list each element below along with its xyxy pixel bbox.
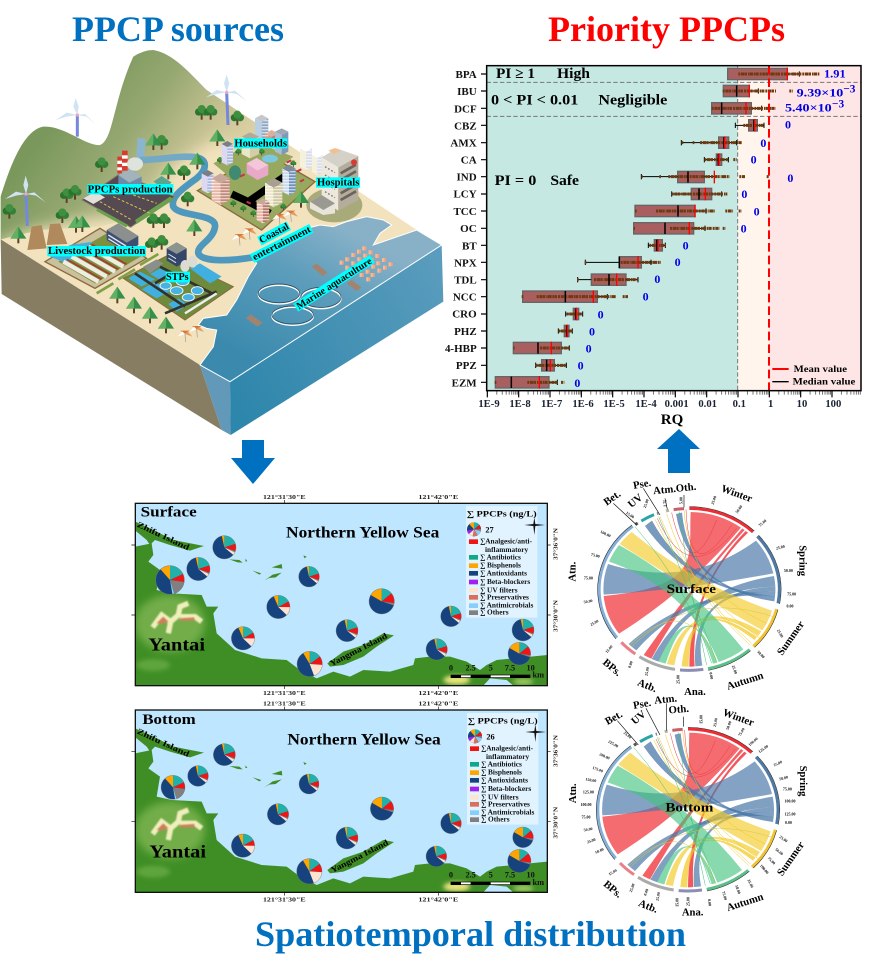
x axis tick labels: 1E-7 xyxy=(541,399,563,410)
sector tick labels: 125.00 xyxy=(785,812,795,817)
priority index values: 0 xyxy=(683,238,689,252)
sector tick labels: 25.00 xyxy=(655,892,661,901)
sector tick labels: 50.00 xyxy=(779,774,789,781)
coordinate labels: 121°31'30"E xyxy=(263,494,306,501)
fish cages xyxy=(258,284,341,325)
city block xyxy=(197,142,315,230)
sector tick labels: 25.00 xyxy=(675,675,680,684)
map legend: ∑ Bisphenols xyxy=(481,768,522,777)
sector tick labels: 200.00 xyxy=(599,751,611,761)
sector tick labels: 15.00 xyxy=(604,644,614,654)
x axis tick labels: 0.01 xyxy=(698,399,717,410)
sector tick labels: 25.00 xyxy=(623,730,633,740)
sector labels xyxy=(568,693,808,919)
sea label: Northern Yellow Sea xyxy=(286,525,440,542)
sand xyxy=(0,138,415,362)
label: Livestock production: Livestock production xyxy=(48,246,146,257)
coordinate labels: 121°31'30"E xyxy=(263,897,306,904)
sector tick labels: 125.00 xyxy=(757,744,769,754)
threshold RQ = 1 xyxy=(766,66,772,391)
x axis tick labels: 1E-9 xyxy=(478,399,500,410)
livestock farm xyxy=(45,223,158,293)
sector tick labels: 75.00 xyxy=(757,518,767,528)
priority index values: 0 xyxy=(675,255,681,269)
sector tick labels: 50.00 xyxy=(583,826,593,832)
scale bar: 10 xyxy=(526,663,535,672)
x axis tick labels: 1E-5 xyxy=(603,399,625,410)
sector tick labels: 50.00 xyxy=(725,720,732,731)
sector tick labels: 75.00 xyxy=(584,575,593,580)
x axis tick labels: 1E-6 xyxy=(572,399,594,410)
sector tick labels: 0.00 xyxy=(708,672,715,680)
sector tick labels: 25.00 xyxy=(773,759,783,767)
arrow: sources down to distribution xyxy=(231,440,275,484)
map legend xyxy=(466,506,537,618)
scale bar: 5 xyxy=(489,871,493,880)
compound labels: PHZ xyxy=(454,326,477,338)
x axis tick labels: 0.1 xyxy=(733,399,746,410)
sector tick labels: 75.00 xyxy=(721,891,728,901)
block left face xyxy=(1,239,222,430)
sector tick labels: 25.00 xyxy=(731,664,739,675)
sector labels: Ana. xyxy=(682,908,704,919)
map legend: ∑ Preservatives xyxy=(480,592,529,601)
map legend: ∑ UV filters xyxy=(481,792,519,801)
sector tick labels: 25.00 xyxy=(628,883,636,893)
priority index values: 0 xyxy=(578,358,584,372)
coordinate labels: 37°30'0"N xyxy=(552,600,559,632)
compound labels: CRO xyxy=(452,309,477,321)
river xyxy=(140,138,253,260)
map legend xyxy=(467,713,538,825)
scale bar xyxy=(449,663,544,680)
sector tick labels: 25.00 xyxy=(589,618,599,627)
sector labels: Summer xyxy=(776,619,807,658)
map legend: ∑Analgesic/anti- xyxy=(480,537,533,546)
panel: surface map xyxy=(131,494,559,697)
sector tick labels: 100.00 xyxy=(747,736,759,747)
map legend: ∑ Antibiotics xyxy=(480,552,521,561)
label: Marine aquaculture: Marine aquaculture xyxy=(295,256,375,312)
city label: Yantai xyxy=(149,841,206,861)
whiskers xyxy=(536,71,799,385)
priority index values: 0 xyxy=(643,290,649,304)
sector tick labels: 15.00 xyxy=(625,510,635,519)
north arrow xyxy=(525,724,546,742)
panel: bottom chord diagram xyxy=(568,693,808,919)
sector labels: Atn. xyxy=(568,561,579,582)
scale bar: 2.5 xyxy=(465,663,476,672)
map legend: ∑ Antimicrobials xyxy=(480,601,533,610)
x axis tick labels: 1E-4 xyxy=(635,399,657,410)
sector tick labels xyxy=(581,715,795,907)
map terrain xyxy=(131,707,551,896)
sector labels: Bet. xyxy=(602,489,623,508)
map legend: 27 xyxy=(485,525,494,534)
sector tick labels: 100.00 xyxy=(581,802,591,807)
label: STPs: STPs xyxy=(166,272,189,283)
region label: High xyxy=(496,66,590,82)
compound labels: 4-HBP xyxy=(445,343,477,355)
region label: Safe xyxy=(495,173,580,189)
island label: Yangma: Yangma Island xyxy=(329,838,390,875)
sector labels: Autumn xyxy=(726,892,765,914)
sector tick labels: 100.00 xyxy=(759,863,770,875)
compound labels: CBZ xyxy=(454,120,477,132)
sector tick labels: 25.00 xyxy=(778,834,789,843)
chart legend xyxy=(772,364,855,387)
sector tick labels: 25.00 xyxy=(776,628,785,638)
sector tick labels: 0.00 xyxy=(785,820,792,825)
map legend: 26 xyxy=(486,732,495,741)
compound labels: IBU xyxy=(457,86,477,98)
priority index values: 0 xyxy=(586,341,592,355)
oyster floats xyxy=(340,246,393,281)
compound labels: TCC xyxy=(453,206,477,218)
map legend: ∑ Antioxidants xyxy=(480,568,527,577)
chart legend: Mean value xyxy=(794,364,847,374)
scale bar: 2.5 xyxy=(465,871,476,880)
sector labels: UV xyxy=(630,709,649,727)
map legend: inflammatory xyxy=(486,752,529,761)
block front corner face xyxy=(200,365,231,435)
compound labels: BPA xyxy=(456,69,477,81)
priority index values: 0 xyxy=(741,187,747,201)
map legend: ∑ Antimicrobials xyxy=(481,808,534,817)
chart background zones xyxy=(487,66,861,391)
sector tick labels: 125.00 xyxy=(583,789,594,794)
north arrow xyxy=(524,517,545,535)
sector tick labels: 25.00 xyxy=(642,498,650,509)
priority index values: −3 xyxy=(832,98,844,110)
coordinate labels: 121°42'0"E xyxy=(418,494,459,501)
sector labels: Winter xyxy=(719,484,754,505)
sector tick labels: 0.00 xyxy=(642,888,649,896)
city buildings xyxy=(202,115,323,223)
sector tick labels: 15.00 xyxy=(699,715,704,724)
map legend: ∑ Beta-blockers xyxy=(481,784,531,793)
scale bar: 5 xyxy=(489,663,493,672)
priority index values: 0 xyxy=(754,204,760,218)
sector tick labels: 100.00 xyxy=(600,529,612,538)
priority index values: 0 xyxy=(574,376,580,390)
sector labels: Spring xyxy=(797,766,808,797)
compound labels: LCY xyxy=(453,189,477,201)
sector tick labels: 75.00 xyxy=(590,552,600,559)
priority index values: 0 xyxy=(654,272,660,286)
map heading: Bottom: Bottom xyxy=(142,712,196,728)
sector tick labels: 25.00 xyxy=(712,718,718,727)
sector labels: Atn. xyxy=(568,783,579,803)
priority index values: 0 xyxy=(787,171,793,185)
panel: surface chord diagram xyxy=(568,478,807,698)
scale bar: 0 xyxy=(449,663,453,672)
sector tick labels: 150.00 xyxy=(585,776,597,783)
sector tick labels: 175.00 xyxy=(592,765,604,773)
x axis title: RQ xyxy=(661,412,683,428)
sector tick labels: 50.00 xyxy=(594,846,604,855)
scale bar: 7.5 xyxy=(505,663,515,672)
sector labels: UV xyxy=(626,492,645,511)
title: PPCP sources: PPCP sources xyxy=(72,9,284,49)
coordinate labels: 121°42'0"E xyxy=(418,690,459,697)
mean lines xyxy=(539,68,787,389)
sector tick labels: 75.00 xyxy=(787,591,796,596)
priority index values: 5.40×10 xyxy=(785,101,832,115)
compound labels: OC xyxy=(460,223,477,235)
x axis tick labels xyxy=(478,399,841,410)
sector labels: BPs. xyxy=(600,657,623,679)
compound labels: DCF xyxy=(454,103,477,115)
priority index values: 0 xyxy=(598,307,604,321)
axis ticks xyxy=(481,74,861,397)
priority index values xyxy=(574,67,856,390)
coordinate labels xyxy=(263,701,559,904)
x axis tick labels: 10 xyxy=(797,399,807,410)
sector tick labels: 50.00 xyxy=(756,649,766,659)
region label: Negligible: 0 < PI < 0.01 xyxy=(491,93,578,109)
label: PPCPs production: PPCPs production xyxy=(88,184,173,195)
map legend: ∑ Others xyxy=(481,815,510,824)
scale bar: km xyxy=(533,671,544,680)
map heading: Surface: Surface xyxy=(141,505,197,521)
sector labels: Atm. xyxy=(654,693,678,707)
priority index values: 1.91 xyxy=(824,67,846,81)
sector tick labels: 25.00 xyxy=(775,544,785,551)
chord centre label: Surface xyxy=(667,582,716,596)
compound labels: EZM xyxy=(452,377,477,389)
sector labels: Atm.Oth. xyxy=(653,482,697,497)
sector labels: Pse. xyxy=(632,478,652,492)
sector tick labels: 100.00 xyxy=(785,799,795,804)
sector labels: Bet. xyxy=(604,709,625,728)
ocean surface xyxy=(198,217,442,382)
coordinate labels: 121°31'30"E xyxy=(263,701,306,708)
sector tick labels xyxy=(583,495,796,684)
priority index values: 0 xyxy=(760,136,766,150)
chord centre label: Bottom xyxy=(665,801,714,815)
sector tick labels: 50.00 xyxy=(734,504,743,514)
coordinate labels: 37°36'0"N xyxy=(552,528,559,560)
scale bar: km xyxy=(533,878,544,887)
scale bar: 0 xyxy=(449,871,453,880)
priority index values: 0 xyxy=(751,153,757,167)
sector labels: Atb. xyxy=(636,678,658,695)
map legend: ∑ Bisphenols xyxy=(480,561,521,570)
label: Coastal entertainment: entertainment xyxy=(251,224,314,263)
threshold lines xyxy=(487,66,861,391)
label: Coastal entertainment: Coastal xyxy=(257,221,291,246)
sector labels: Summer xyxy=(776,840,807,878)
map legend: ∑ Beta-blockers xyxy=(480,577,530,586)
coordinate labels: 121°31'30"E xyxy=(263,690,306,697)
region label: High: PI ≥ 1 xyxy=(496,66,535,82)
scale bar: 7.5 xyxy=(505,871,515,880)
pie charts at stations xyxy=(161,744,533,884)
x axis tick labels: 0.001 xyxy=(665,399,689,410)
plot frame xyxy=(487,66,861,391)
rocks xyxy=(27,223,67,250)
region label: Safe: PI = 0 xyxy=(495,173,536,189)
panel: bottom map xyxy=(131,701,559,904)
map legend: ∑ Others xyxy=(480,608,509,617)
arrow: distribution up to priority xyxy=(657,429,700,473)
coordinate labels: 37°36'0"N xyxy=(552,735,559,767)
map legend: ∑ Antibiotics xyxy=(481,759,522,768)
panel: risk quotient boxplot xyxy=(445,66,861,428)
chord ribbons and sector bands xyxy=(598,507,781,670)
sector tick labels: 75.00 xyxy=(737,727,746,737)
sector labels: Oth. xyxy=(668,704,690,717)
coordinate labels: 37°30'0"N xyxy=(552,807,559,838)
title: Priority PPCPs: Priority PPCPs xyxy=(548,9,785,49)
region label: Negligible xyxy=(491,92,668,109)
compound labels: PPZ xyxy=(456,360,477,372)
hill xyxy=(1,50,417,365)
scale bar xyxy=(449,871,544,887)
sector labels xyxy=(568,478,807,698)
sector labels: Spring xyxy=(796,545,807,577)
x axis tick labels: 1 xyxy=(768,399,773,410)
compound labels: BT xyxy=(462,240,477,252)
island label: Zhifu: Zhifu Island xyxy=(136,727,191,759)
sewage treatment plant xyxy=(123,242,233,320)
map legend: ∑ PPCPs (ng/L) xyxy=(467,509,537,518)
x axis tick labels: 100 xyxy=(825,399,841,410)
median lines xyxy=(511,85,754,388)
sea label: Northern Yellow Sea xyxy=(287,731,441,748)
chart legend: Median value xyxy=(793,377,855,387)
sector tick labels: 15.00 xyxy=(607,868,618,876)
sector tick labels: 50.00 xyxy=(583,598,593,604)
title: Spatiotemporal distribution: Spatiotemporal distribution xyxy=(255,914,686,954)
compound labels: CA xyxy=(461,155,477,167)
sector tick labels: 0.00 xyxy=(787,603,793,608)
priority index values: 0 xyxy=(785,118,791,132)
boxes xyxy=(495,68,787,388)
sector tick labels: 15.00 xyxy=(674,898,679,907)
scale bar: 10 xyxy=(526,871,535,880)
map legend: ∑ UV filters xyxy=(480,585,518,594)
sector tick labels: 50.00 xyxy=(774,847,784,856)
sector labels: BPs. xyxy=(601,879,624,901)
map legend: inflammatory xyxy=(485,545,528,554)
map legend: ∑ Preservatives xyxy=(481,799,530,808)
sector tick labels: 0.00 xyxy=(707,899,713,906)
city label: Yantai xyxy=(148,635,205,655)
sector tick labels: 75.00 xyxy=(767,856,777,866)
priority index values: 0 xyxy=(741,222,747,236)
region label: Safe: Safe xyxy=(550,173,580,189)
compound labels: NCC xyxy=(453,292,477,304)
hospital xyxy=(306,148,362,222)
sector tick labels: 25.00 xyxy=(710,495,717,505)
sector tick labels: 50.00 xyxy=(784,568,793,573)
pie charts at stations xyxy=(156,536,534,677)
factory xyxy=(82,151,175,227)
x axis tick labels: 1E-8 xyxy=(509,399,531,410)
map terrain xyxy=(131,500,551,689)
compound labels: IND xyxy=(457,172,477,184)
priority index values: −3 xyxy=(843,83,856,95)
region label: High: High xyxy=(557,66,590,82)
compound labels: AMX xyxy=(450,137,477,149)
region label: Negligible: Negligible xyxy=(598,92,668,108)
sector labels: Ana. xyxy=(684,687,706,698)
compound labels xyxy=(445,69,477,389)
sector tick labels: 25.00 xyxy=(644,667,650,676)
panel: isometric PPCP source landscape xyxy=(0,50,443,435)
map legend: ∑ Antioxidants xyxy=(481,775,528,784)
sector tick labels: 25.00 xyxy=(586,837,596,844)
sector tick labels: 225.00 xyxy=(607,739,619,749)
block right face xyxy=(230,245,443,435)
coordinate labels: 121°42'0"E xyxy=(418,701,459,708)
parasols xyxy=(178,211,298,342)
floating rafts xyxy=(246,263,361,327)
data dots xyxy=(495,74,819,382)
coordinate labels xyxy=(263,494,559,697)
sector tick labels: 75.00 xyxy=(783,787,792,792)
compound labels: NPX xyxy=(454,257,477,269)
sector tick labels: 5.00 xyxy=(679,497,684,504)
map legend: ∑Analgesic/anti- xyxy=(481,744,534,753)
sector tick labels: 25.00 xyxy=(685,897,690,906)
sector labels: Pse. xyxy=(632,698,652,712)
sector tick labels: 75.00 xyxy=(582,815,590,820)
leader lines xyxy=(617,703,683,745)
compound labels: TDL xyxy=(454,274,477,286)
sector tick labels: 0.00 xyxy=(627,660,634,669)
island label: Zhifu: Zhifu Island xyxy=(136,520,191,552)
sector tick labels: 25.00 xyxy=(747,878,755,888)
map legend: ∑ PPCPs (ng/L) xyxy=(468,716,538,725)
island label: Yangma: Yangma Island xyxy=(328,631,389,668)
sector tick labels: 1.75 xyxy=(663,500,668,507)
trees xyxy=(3,105,309,333)
priority index values: 0 xyxy=(589,324,595,338)
leader lines xyxy=(613,488,684,525)
wind turbines xyxy=(5,75,247,226)
sector tick labels: 50.00 xyxy=(734,884,742,895)
priority index values: 9.39×10 xyxy=(797,86,843,100)
chord ribbons and sector bands xyxy=(596,727,780,891)
sector labels: Winter xyxy=(721,708,756,729)
label: Hospitals: Hospitals xyxy=(317,177,359,188)
label: Households: Households xyxy=(234,138,287,149)
sector labels: Autumn xyxy=(726,671,765,693)
coordinate labels: 121°42'0"E xyxy=(418,897,459,904)
sector labels: Atb. xyxy=(637,898,659,916)
